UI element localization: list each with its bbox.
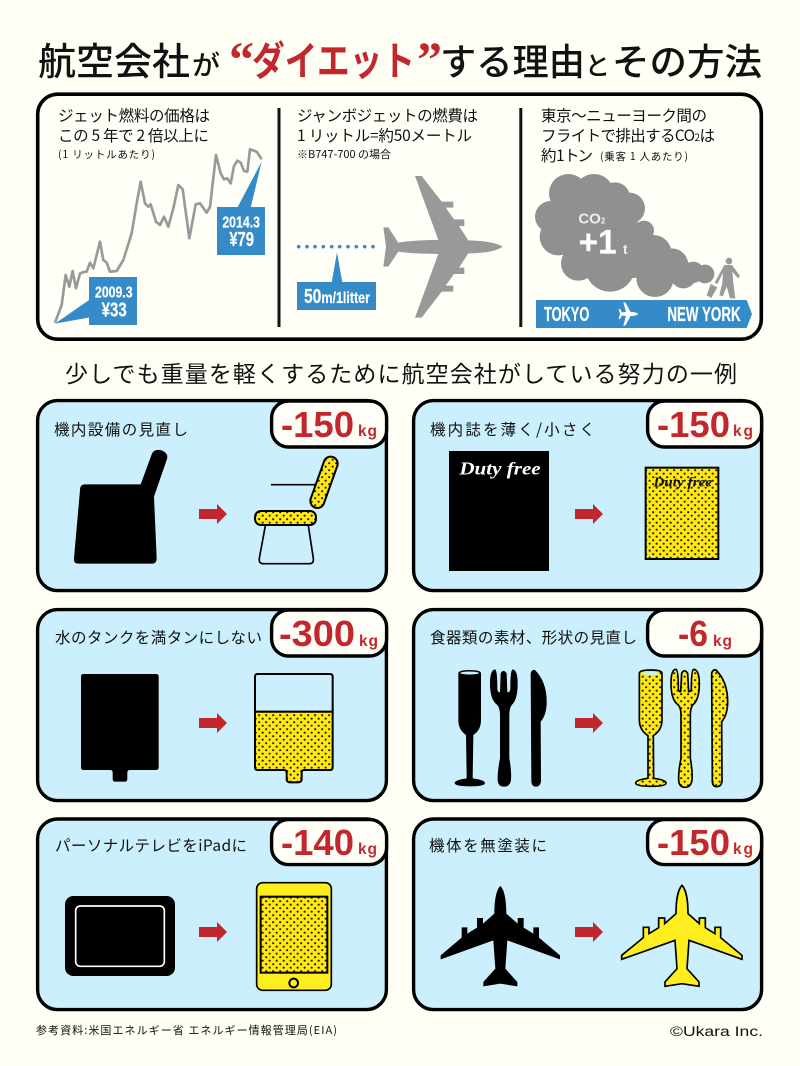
icon: CO2 cloud — [535, 174, 714, 297]
icons: magazine before and after — [449, 451, 718, 571]
text: CO2 emissions — [541, 104, 715, 166]
text: jumbo jet fuel economy — [297, 104, 478, 162]
text: jet fuel price: この 5 年で 2 倍以上に — [58, 124, 209, 146]
badge: -150kg — [648, 820, 762, 865]
title: ダイエット — [252, 29, 415, 87]
label: 食器類の素材、形状の見直し — [430, 626, 637, 648]
callout: 2014.3 — [217, 162, 265, 255]
illustration: CO2 cloud and route — [535, 174, 752, 328]
icons: tableware before and after — [455, 669, 728, 787]
callout: 2014.3: ¥79 — [229, 228, 254, 251]
badge: -150kg: -150 — [281, 404, 354, 445]
title: が — [192, 44, 220, 83]
title: その方法 — [612, 32, 762, 86]
source note: 参考資料:米国エネルギー省 エネルギー情報管理局(EIA) — [36, 1022, 337, 1038]
CO2 +1t label: CO2 — [578, 210, 606, 227]
badge: -6kg — [648, 610, 762, 656]
route arrow: Tokyo to New York — [536, 300, 752, 328]
label: 水のタンクを満タンにしない — [55, 626, 262, 648]
text: jumbo jet fuel economy: ジャンボジェットの燃費は — [297, 104, 478, 126]
callout: 2009.3: 2009.3 — [95, 284, 133, 301]
badge: -150kg — [272, 401, 387, 447]
badge: -150kg: -150 — [657, 404, 730, 445]
title: 航空会社 — [38, 31, 190, 86]
text: jumbo jet fuel economy: ※B747-700 の場合 — [297, 146, 391, 162]
panel: in-flight magazine — [414, 401, 762, 591]
title: と — [585, 46, 610, 83]
panel: cabin equipment — [38, 401, 387, 591]
copyright: ©Ukara Inc. — [670, 1023, 763, 1039]
heading: examples: 少しでも重量を軽くするために航空会社がしている努力の一例 — [65, 355, 737, 389]
illustration: plane with fuel distance — [297, 176, 503, 318]
title — [38, 29, 762, 87]
text: jet fuel price: ジェット燃料の価格は — [58, 104, 210, 126]
badge: -6kg: kg — [713, 633, 732, 650]
panel: personal TV — [38, 819, 387, 1010]
callout: 50m/1litter: 50m/1litter — [304, 286, 370, 308]
callout: 50m/1litter — [297, 252, 376, 310]
badge: -150kg: kg — [733, 423, 753, 440]
title: “ — [229, 31, 254, 87]
text: CO2 emissions: 東京〜ニューヨーク間の — [541, 104, 707, 126]
text: jumbo jet fuel economy: 1 リットル=約50メートル — [297, 124, 472, 146]
icons: seat before and after — [74, 450, 331, 564]
panel: key facts — [38, 94, 761, 339]
label: 機内誌を薄く/小さく — [430, 418, 595, 440]
icons: plane before and after — [441, 885, 742, 986]
callout: 2009.3 — [55, 277, 137, 325]
icons: tank before and after — [81, 674, 333, 782]
callout: 2009.3: ¥33 — [102, 299, 127, 322]
badge: -6kg: -6 — [678, 613, 708, 654]
badge: -150kg: kg — [733, 841, 753, 858]
badge: -300kg: kg — [359, 633, 378, 650]
badge: -140kg — [272, 820, 387, 865]
callout: 2014.3: 2014.3 — [222, 214, 260, 231]
title: する理由 — [440, 32, 585, 86]
CO2 +1t label — [578, 210, 628, 261]
label: 機体を無塗装に — [429, 834, 547, 856]
route arrow: Tokyo to New York: TOKYO — [544, 304, 589, 326]
panel: tableware — [414, 610, 762, 801]
CO2 +1t label: t — [623, 241, 628, 257]
text: jet fuel price — [58, 104, 210, 162]
text: jet fuel price: (1 リットルあたり) — [58, 147, 155, 162]
CO2 +1t label: +1 — [579, 223, 617, 261]
badge: -140kg: -140 — [281, 822, 354, 863]
title: ” — [417, 31, 442, 87]
icons: TV and iPad — [65, 883, 331, 990]
label: パーソナルテレビをiPadに — [55, 834, 247, 856]
text: CO2 emissions: 約 1 トン — [541, 144, 593, 166]
badge: -150kg: -150 — [657, 822, 730, 863]
badge: -300kg: -300 — [279, 613, 355, 654]
route arrow: Tokyo to New York: NEW YORK — [667, 304, 741, 326]
text: CO2 emissions: (乗客 1 人あたり) — [600, 149, 688, 164]
label: 機内設備の見直し — [54, 418, 188, 440]
badge: -300kg — [272, 610, 387, 656]
icon: traveler — [707, 258, 740, 298]
badge: -150kg — [648, 401, 762, 447]
badge: -140kg: kg — [358, 841, 377, 858]
line chart: jet fuel price — [55, 149, 265, 325]
icons: magazine before and after: Duty free — [458, 458, 541, 478]
icons: magazine before and after: Duty free — [652, 475, 712, 490]
icon: gray plane — [383, 176, 503, 318]
panel: unpainted fuselage — [414, 819, 762, 1010]
panel: water tank — [38, 610, 387, 801]
dotted line: 50 m — [297, 245, 375, 248]
text: CO2 emissions: フライトで排出するCO2は — [541, 124, 715, 146]
badge: -150kg: kg — [358, 423, 377, 440]
